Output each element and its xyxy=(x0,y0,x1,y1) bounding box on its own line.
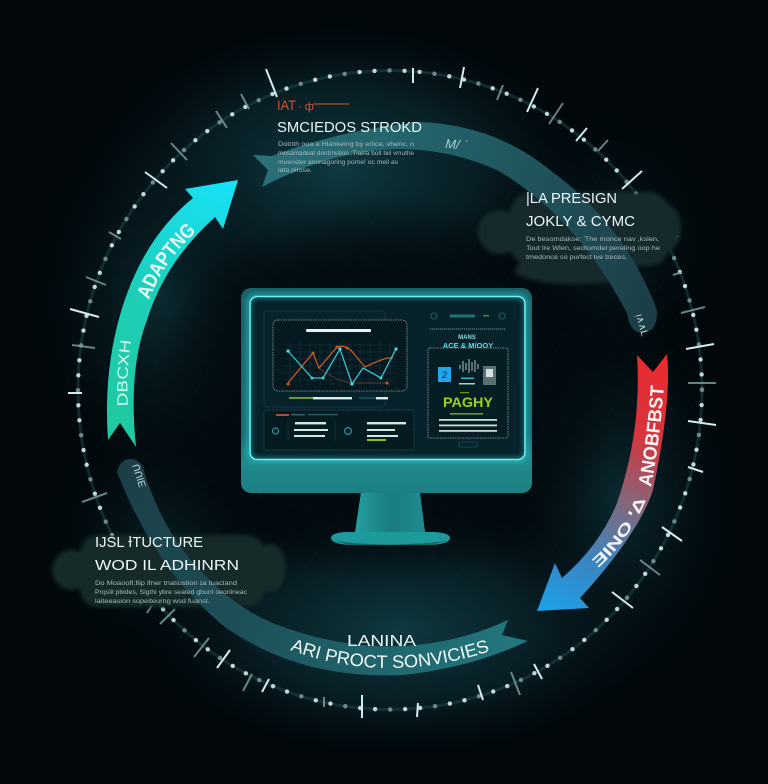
step heading: |LA PRESIGN xyxy=(526,190,617,207)
arrow label: lower word: ƎINO 'Δ xyxy=(592,500,646,568)
monitor bezel xyxy=(241,288,532,493)
dotted ring xyxy=(78,70,702,710)
step heading xyxy=(95,534,239,574)
right header row xyxy=(430,313,506,329)
step body: laiteeasion sopeiteurng wsd fuanst. xyxy=(95,598,210,605)
text block: top step xyxy=(277,97,422,174)
step body: tmedonce so purfect lve treces. xyxy=(526,254,627,261)
grey card icon xyxy=(483,366,496,385)
step heading: JOKLY & CYMC xyxy=(526,213,635,230)
chart grid xyxy=(285,342,395,386)
neon border xyxy=(249,296,526,460)
step heading: IJSL ƗTUCTURE xyxy=(95,534,203,551)
arrow: adapting cyan xyxy=(106,180,238,447)
step heading: LANINA xyxy=(347,633,416,650)
arrow label: upper word: ANOBFBST xyxy=(639,385,664,487)
right dashed panel xyxy=(428,348,508,438)
arrow label: adapting: ADAPTNG xyxy=(138,224,194,300)
monitor xyxy=(241,288,532,545)
legend bars xyxy=(289,397,388,399)
step curved title: ARI PROCT SONVICIES xyxy=(290,640,488,668)
step tag: · ф xyxy=(298,101,314,113)
ribbon label top: M/ ˈ xyxy=(445,136,468,153)
green word: PAGHY xyxy=(443,394,494,410)
text block: bottom step xyxy=(290,633,488,668)
step body: Dotnth ooa a Hlankeing by eriice, vhenc, n xyxy=(278,141,414,148)
text lines xyxy=(439,419,497,432)
panel backdrop: left blob xyxy=(52,535,286,607)
small bars xyxy=(459,378,475,384)
step body: Prqslil pbides, Sigthi ybre seated gbunt oeorlineac xyxy=(95,589,248,596)
arrow: bottom ribbon xyxy=(117,459,528,675)
ribbon label: right end: ᴉ∧∧L xyxy=(633,313,650,338)
step body: mesamadeat dontrnution ;Tiakla bolt biil vmuthe xyxy=(278,150,414,157)
step body: lata pirose. xyxy=(278,167,312,174)
right panel heading: MANS xyxy=(458,335,476,341)
right panel heading xyxy=(443,335,493,350)
text block: left step xyxy=(95,534,248,605)
chart panel xyxy=(273,320,407,391)
monitor stand xyxy=(331,492,450,545)
orange series xyxy=(288,346,393,383)
lower stats panel xyxy=(264,410,414,450)
step body xyxy=(526,236,660,261)
ribbon label bottom left: ƎIUU xyxy=(131,462,149,488)
step body xyxy=(278,141,414,174)
text block: right step xyxy=(526,190,660,261)
arrow: red to blue xyxy=(537,354,668,611)
teal series xyxy=(288,349,396,384)
step tag: IAT xyxy=(277,97,296,113)
chart points xyxy=(286,346,398,386)
arrow label: dbcxh: DBCXH xyxy=(117,340,131,405)
dark series xyxy=(319,368,387,383)
blue card icon: 2 xyxy=(441,370,447,380)
waveform icon xyxy=(460,359,478,373)
step body xyxy=(95,580,248,605)
step heading xyxy=(526,190,635,230)
monitor small tab xyxy=(459,442,477,447)
right panel heading: ACE & M/OOY xyxy=(443,341,493,350)
step body: muenster anonagoring pome! oc mell as xyxy=(278,159,399,166)
step body: Tout lre Wlen, sedtomdel pereling oop he xyxy=(526,245,660,252)
step body: Do Moaoofl;flip ifner tnatiustion ɪa tuacland xyxy=(95,580,237,587)
step heading: SMCIEDOS STROKD xyxy=(277,119,422,136)
arrow: top grey-teal ribbon xyxy=(253,122,657,333)
screen frame left xyxy=(264,311,385,407)
panel backdrop: right blob xyxy=(478,192,681,284)
chart title bar xyxy=(306,329,371,332)
screen xyxy=(249,296,526,460)
step body: De besomdakse: 'The monce nav ,kslen, xyxy=(526,236,659,243)
ring tick marks xyxy=(68,67,716,718)
step tag xyxy=(277,97,349,113)
step heading: WOD IL ADHINRN xyxy=(95,557,239,574)
